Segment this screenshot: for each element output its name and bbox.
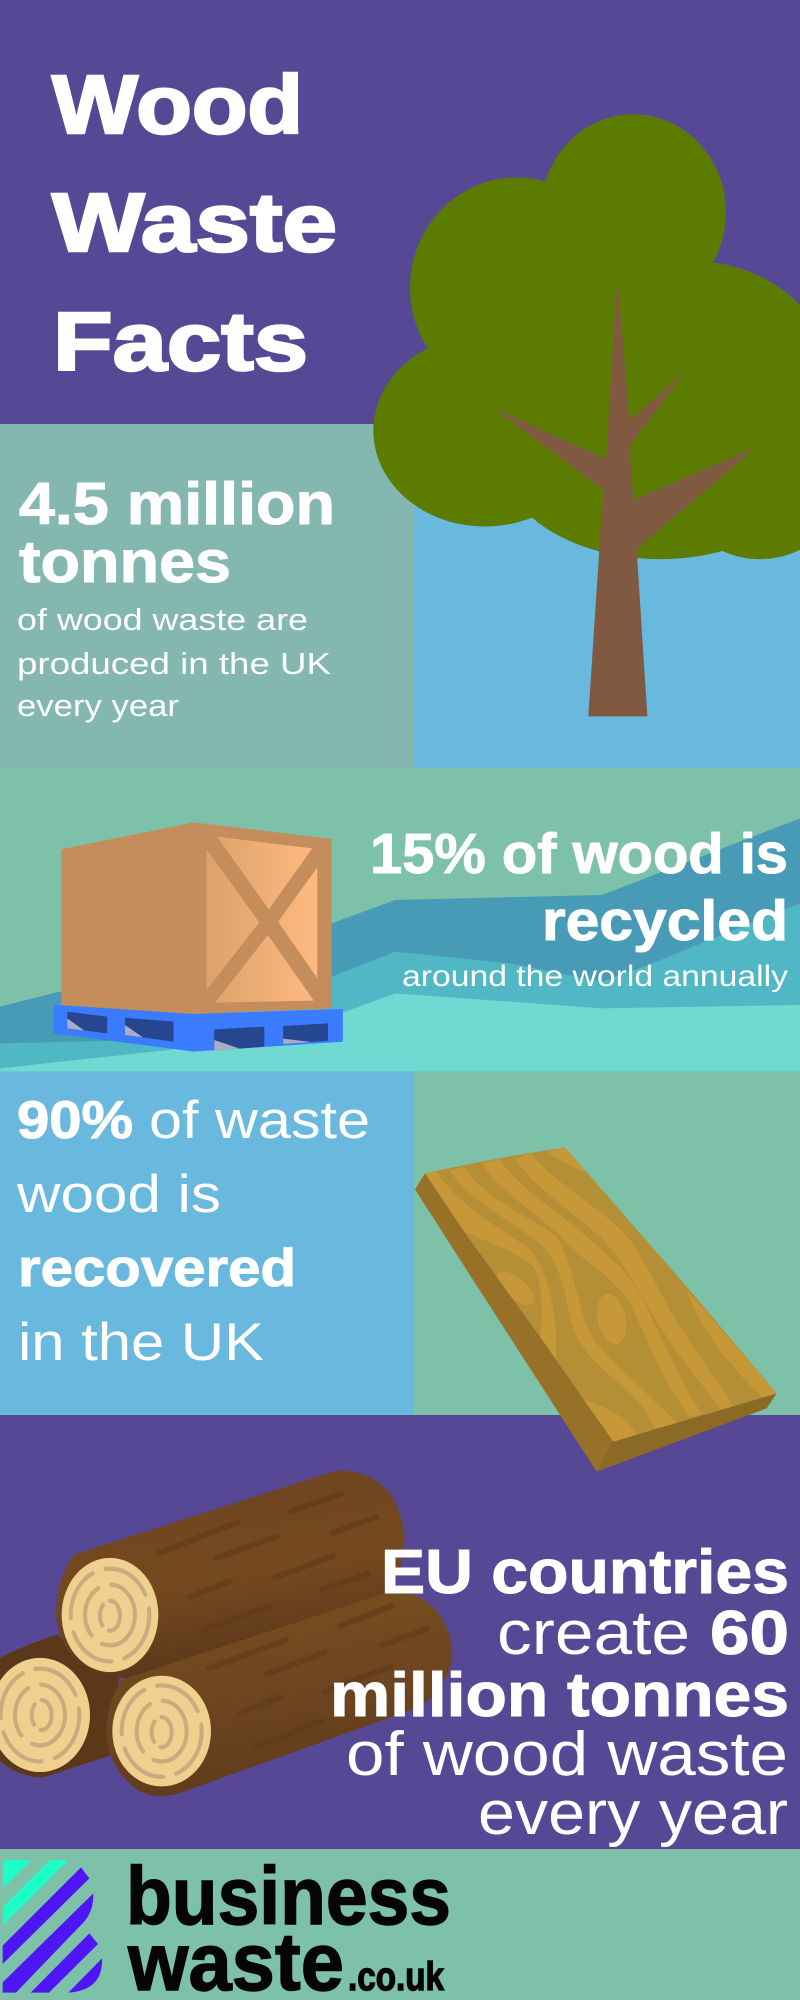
text block: 90% recovered: 90% [17, 1091, 133, 1150]
chart-like waves background [0, 818, 800, 1072]
text block: 90% recovered: of waste [149, 1091, 370, 1150]
logo wordmark: .co.uk [348, 1955, 445, 1999]
panel: 90% recovered text background [0, 1071, 414, 1415]
text block: EU countries: EU countries [381, 1538, 789, 1607]
text block: EU countries: create [497, 1599, 690, 1668]
text block: EU countries: million tonnes [330, 1661, 789, 1730]
text block: 90% recovered [16, 1091, 370, 1372]
text block: 4.5 million tonnes: tonnes [19, 529, 231, 595]
text block: 15% recycled: recycled [542, 889, 788, 953]
title [52, 58, 337, 388]
title: Facts [53, 295, 308, 388]
crate side panel with X brace [207, 837, 317, 1003]
text block: 90% recovered: in the UK [18, 1313, 264, 1372]
text block: 4.5 million tonnes: every year [17, 688, 179, 723]
logo wordmark: business [126, 1851, 451, 1942]
text block: 90% recovered: wood is [16, 1165, 221, 1224]
title: Waste [52, 176, 337, 269]
text block: 4.5 million tonnes [17, 471, 335, 723]
plank end edge [597, 1393, 777, 1472]
plank side edge [415, 1173, 613, 1472]
text block: 15% recycled [370, 822, 788, 993]
text block: EU countries: every year [478, 1779, 788, 1848]
panel: sky behind tree [414, 424, 800, 768]
panel: EU countries background [0, 1415, 800, 1849]
logo wordmark [126, 1851, 451, 2000]
panel: plank background [414, 1071, 800, 1415]
title: Wood [52, 58, 303, 151]
panel: 4.5 million tonnes text background [0, 424, 414, 768]
top log [56, 1471, 404, 1683]
front log [106, 1592, 452, 1796]
text block: 4.5 million tonnes: 4.5 million [19, 471, 335, 537]
text block: EU countries: 60 [710, 1599, 789, 1668]
text block: 4.5 million tonnes: of wood waste are [17, 602, 308, 637]
icon: tree [373, 114, 800, 716]
text block: 15% recycled: 15% of wood is [370, 822, 788, 886]
icon: business waste logo mark [3, 1860, 102, 1993]
icon: stacked logs [0, 1471, 452, 1796]
icon: wooden plank [415, 1148, 777, 1472]
icon: crate on pallet [54, 822, 343, 1052]
plank top face with grain [425, 1148, 776, 1442]
text block: 90% recovered: recovered [18, 1239, 296, 1298]
panel: title background [0, 0, 800, 424]
crate body [61, 822, 332, 1014]
text block: 15% recycled: around the world annually [402, 960, 788, 993]
panel: logo footer background [0, 1849, 800, 2000]
text block: 4.5 million tonnes: produced in the UK [17, 646, 331, 681]
tree trunk and branches [492, 276, 757, 716]
text block: EU countries [330, 1538, 789, 1848]
text block: EU countries: of wood waste [346, 1720, 788, 1789]
tree canopy [373, 114, 800, 559]
pallet [54, 1005, 343, 1052]
panel: 15% recycled background [0, 768, 800, 1071]
back left log [0, 1635, 120, 1777]
